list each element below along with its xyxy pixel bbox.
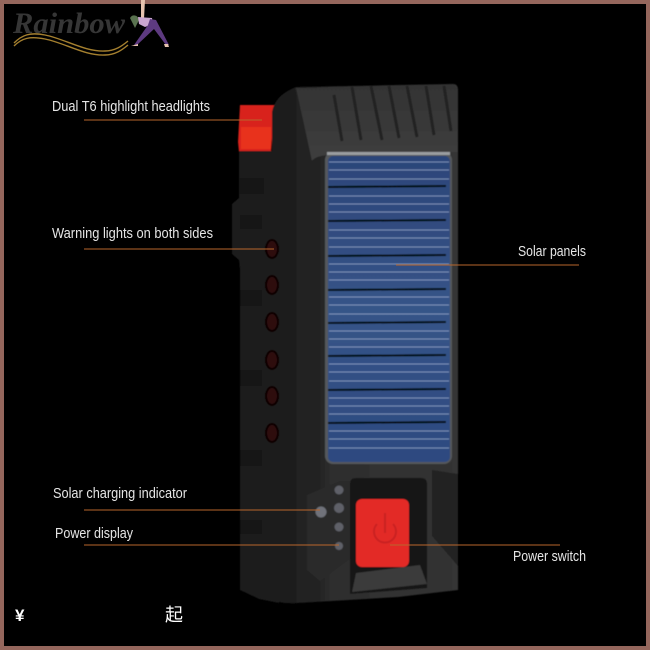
label: power display: Power display <box>55 525 133 542</box>
top grooved face <box>296 85 458 161</box>
solar panel frame <box>325 152 452 464</box>
price: yen sign: ¥ <box>15 606 25 625</box>
side body <box>232 151 279 603</box>
product: solar flashlight <box>232 84 458 603</box>
label: power switch: Power switch <box>513 548 586 565</box>
lower control recess <box>307 481 350 581</box>
icon: power <box>374 513 396 543</box>
main body <box>272 84 458 603</box>
logo: Rainbow <box>12 0 169 55</box>
warning lights <box>266 240 278 442</box>
solar panel <box>328 156 450 462</box>
label: solar panels: Solar panels <box>518 243 586 260</box>
red headlight <box>238 105 274 152</box>
ridges <box>334 86 451 141</box>
side ribs <box>240 178 264 534</box>
label: warning lights: Warning lights on both sides <box>52 225 213 242</box>
power button <box>356 499 409 567</box>
indicator dots <box>316 486 344 550</box>
price: from: 起 <box>165 605 183 625</box>
icon: yoga figure <box>130 0 169 47</box>
logo: Rainbow: Rainbow <box>12 7 126 40</box>
label: headlights: Dual T6 highlight headlights <box>52 98 210 115</box>
leader lines <box>84 120 579 545</box>
label: solar charging indicator: Solar charging indicator <box>53 485 187 502</box>
